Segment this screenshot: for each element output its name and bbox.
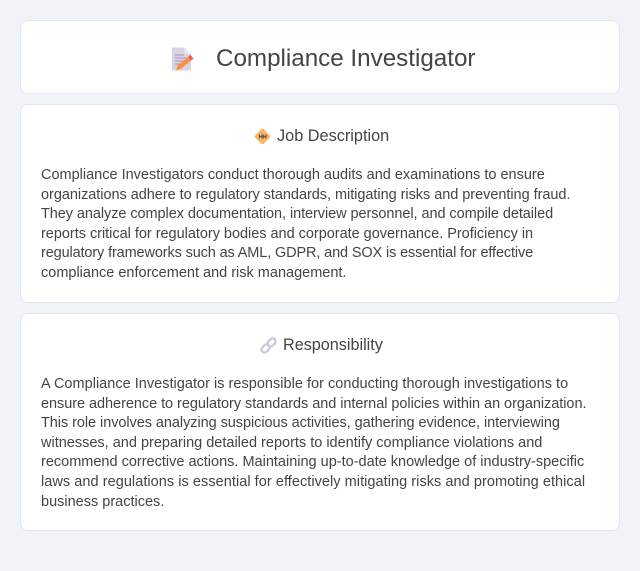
text block: responsibility [41, 376, 586, 510]
heading: job description: Job Description [277, 127, 389, 145]
text block: responsibility: laws and regulations is essential for effectively mitigating risks and promoting ethical [41, 474, 585, 490]
title: Compliance Investigator [216, 45, 475, 72]
icon: chain link [260, 337, 277, 354]
text block: responsibility: business practices. [41, 494, 164, 510]
text block: responsibility: This role involves analyzing suspicious activities, gathering evidence, interviewing [41, 415, 560, 431]
text block: responsibility: witnesses, and preparing detailed reports to identify compliance violations and [41, 435, 542, 451]
panel: job description [20, 104, 620, 303]
icon: document with pencil [172, 48, 194, 70]
text block: job description [41, 167, 570, 281]
text block: job description: They analyze complex documentation, interview personnel, and compile detailed [41, 206, 553, 222]
text block: responsibility: ensure adherence to regulatory standards and internal policies within an organization. [41, 396, 586, 412]
icon: orange road sign [254, 128, 270, 144]
text block: job description: Compliance Investigators conduct thorough audits and examinations to ensure [41, 167, 545, 183]
panel: title card [20, 20, 620, 94]
text block: responsibility: A Compliance Investigator is responsible for conducting thorough investigations to [41, 376, 568, 392]
text block: job description: reports critical for regulatory bodies and corporate governance. Proficiency in [41, 226, 533, 242]
text block: job description: compliance enforcement and risk management. [41, 265, 346, 281]
heading: responsibility: Responsibility [283, 336, 383, 354]
text block: job description: organizations adhere to regulatory standards, mitigating risks and preventing fraud. [41, 187, 570, 203]
text block: responsibility: recommend corrective actions. Maintaining up-to-date knowledge of industry-specific [41, 454, 584, 470]
text block: job description: regulatory frameworks such as AML, GDPR, and SOX is essential for effective [41, 245, 533, 261]
panel: responsibility [20, 313, 620, 531]
